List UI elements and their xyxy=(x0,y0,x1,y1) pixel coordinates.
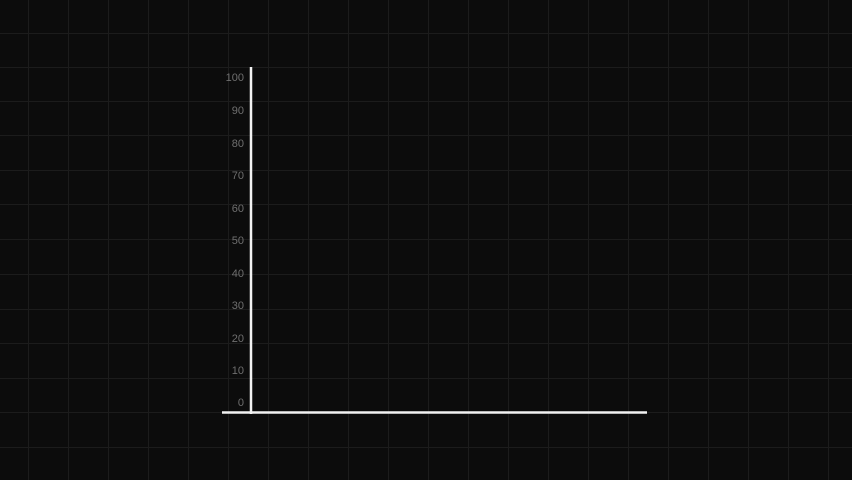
y-axis labels: 30 xyxy=(232,300,244,312)
y-axis labels: 0 xyxy=(238,397,244,409)
y-axis labels: 40 xyxy=(232,268,244,280)
y-axis labels: 20 xyxy=(232,333,244,345)
y-axis labels: 10 xyxy=(232,365,244,377)
y-axis labels: 50 xyxy=(232,235,244,247)
y-axis labels: 100 xyxy=(226,72,244,84)
y-axis labels: 90 xyxy=(232,105,244,117)
y-axis labels: 70 xyxy=(232,170,244,182)
y-axis labels: 60 xyxy=(232,203,244,215)
y-axis labels: 80 xyxy=(232,138,244,150)
